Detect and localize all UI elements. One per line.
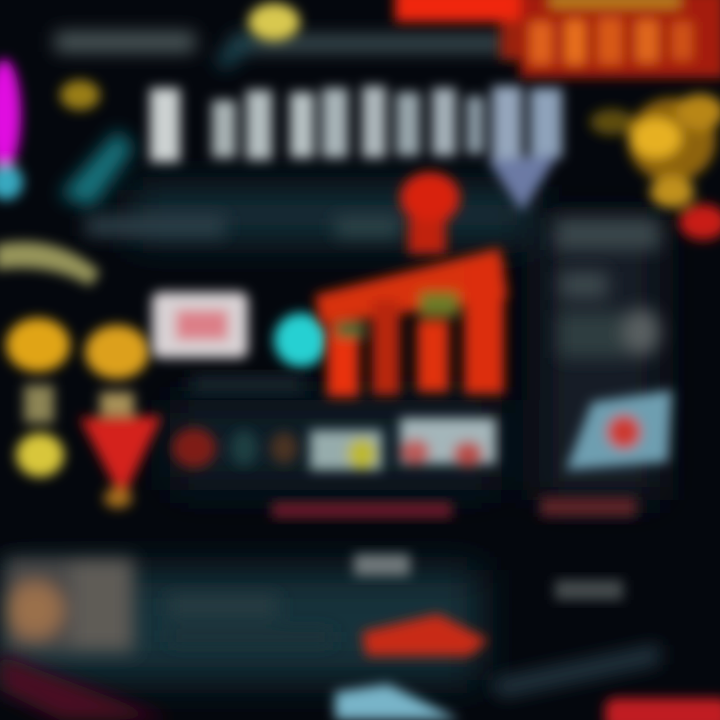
icon: teal streak bbox=[60, 130, 134, 208]
icon: second figure bbox=[80, 325, 162, 508]
bar chart: red bars bbox=[315, 248, 508, 397]
icon: gold coins cluster bbox=[590, 94, 720, 240]
card: white and pink note bbox=[152, 292, 248, 358]
icon: top right red and gold banner bbox=[395, 0, 720, 78]
panel: bottom left beige photo bbox=[5, 558, 135, 653]
subtitle band bbox=[85, 216, 660, 250]
card: right white tile bbox=[400, 418, 496, 467]
card: blue card with red dot bbox=[566, 390, 672, 470]
background glow bbox=[0, 190, 660, 680]
icon: top yellow lamp bbox=[248, 3, 300, 41]
icon row: small tokens bbox=[172, 428, 298, 468]
panel: left wing ribbon bbox=[0, 242, 100, 286]
text block: right white label bbox=[555, 580, 623, 600]
bottom light button bbox=[335, 684, 460, 720]
text block: center white label bbox=[354, 554, 410, 576]
icon: first figure bbox=[6, 318, 70, 477]
icon: red flag on chart bbox=[400, 172, 460, 254]
caption: red text under tiles bbox=[272, 502, 452, 518]
chart caption bbox=[190, 376, 305, 392]
panel: right column grey blocks bbox=[558, 272, 660, 358]
text block: bottom center lines bbox=[168, 597, 333, 644]
caption: red text right bbox=[540, 497, 636, 517]
bottom right red button bbox=[605, 698, 720, 720]
icon: left magenta shape bbox=[0, 59, 23, 200]
card: left white tile bbox=[310, 430, 382, 470]
header strip bbox=[55, 30, 510, 70]
icon: cyan circle bbox=[274, 313, 328, 367]
bottom band bbox=[0, 644, 660, 720]
icon: small gold dot bbox=[60, 80, 100, 110]
icon: red swoosh bbox=[362, 614, 488, 656]
title bbox=[150, 86, 562, 212]
